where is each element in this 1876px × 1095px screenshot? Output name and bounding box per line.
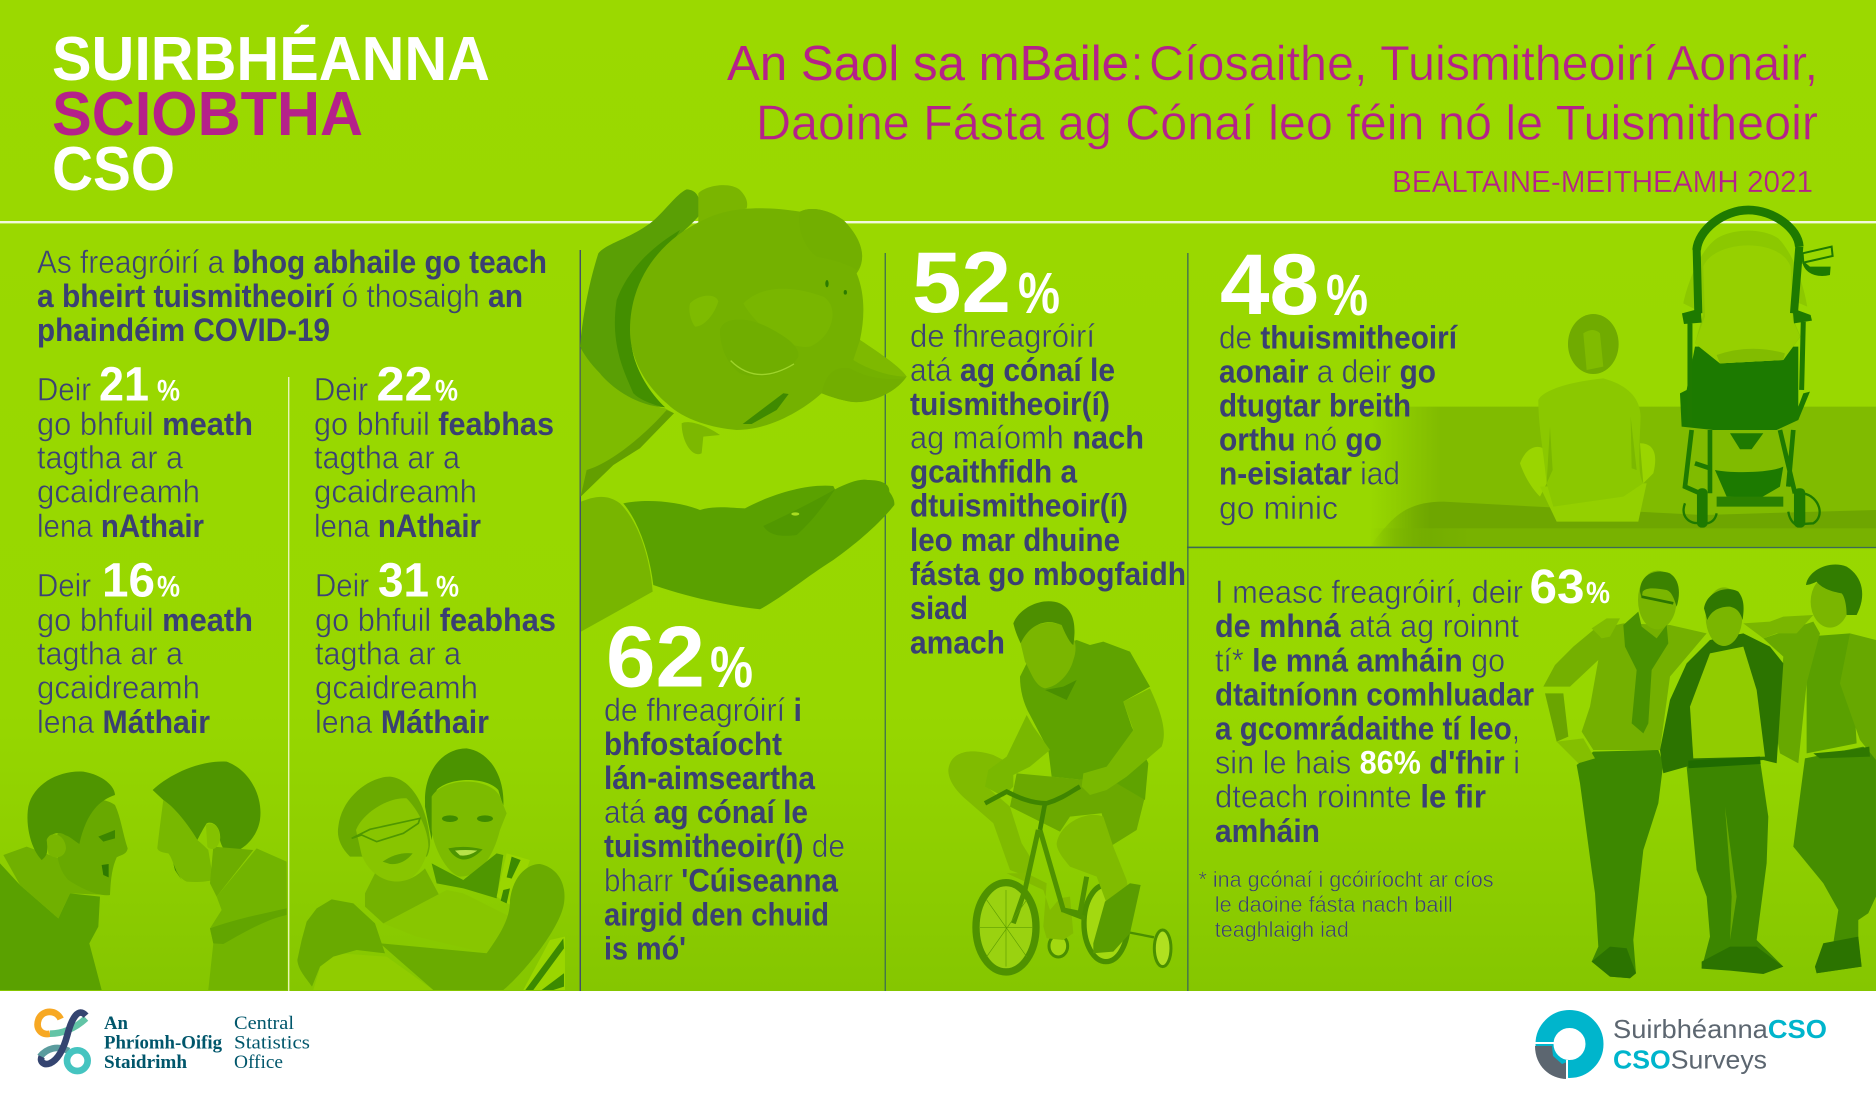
title: Suirbhéanna Sciobtha CSO: CSO [52,135,175,204]
stat: 52% living with parents: dtuismitheoir(í) [910,488,1128,524]
stat: 48% of lone parents: 48 [1220,237,1319,333]
stat: 62% full-time employed living with parents [604,610,845,966]
stat: 48% of lone parents: go minic [1219,490,1338,526]
stat: 21% worsened relationship with father: 21 [99,359,149,412]
stat: 52% living with parents: ag maíomh nach [910,420,1144,456]
stat: 52% living with parents: tuismitheoir(í) [910,386,1110,422]
stat: 22% improved relationship with father: go bhfuil feabhas [314,406,554,442]
stat: 21% worsened relationship with father [37,359,253,544]
icon: surveys ring [1535,1019,1594,1080]
logo: Central Statistics Office [38,1012,310,1073]
stat: 21% worsened relationship with father: Deir [37,372,91,408]
stat: 63% of women, 86% of men sharing: tí* le mná amháin go [1215,642,1505,678]
right man [1763,565,1876,973]
stat: 62% full-time employed living with parents: 62 [606,610,705,706]
logo: Central Statistics Office: Staidrimh [104,1052,187,1073]
text block: relationships intro: phaindéim COVID-19 [37,312,330,348]
stat: 63% of women, 86% of men sharing: I measc freagróirí, deir [1215,574,1523,610]
stat: 52% living with parents: % [1018,261,1060,326]
text block: relationships intro [37,244,547,348]
stat: 16% worsened relationship with mother: go bhfuil meath [37,602,253,638]
stat: 62% full-time employed living with parents: tuismitheoir(í) de [604,828,845,864]
footnote: * ina gcónaí i gcóiríocht ar cíos [1198,867,1494,892]
stat: 22% improved relationship with father: tagtha ar a [314,440,460,476]
stat: 31% improved relationship with mother: gcaidreamh [315,670,478,706]
stat: 63% of women, 86% of men sharing: amháin [1215,813,1320,849]
stat: 52% living with parents: de fhreagróirí [910,318,1095,354]
photo: three men arm in arm [1543,565,1876,978]
stat: 16% worsened relationship with mother: gcaidreamh [37,670,200,706]
open lower hand [581,480,894,632]
logo: Central Statistics Office: An [104,1013,128,1034]
stat: 52% living with parents: atá ag cónaí le [910,352,1115,388]
stat: 48% of lone parents: n-eisiatar iad [1219,456,1400,492]
logo: Central Statistics Office: Statistics [234,1032,310,1054]
title: Suirbhéanna Sciobtha CSO: SUIRBHÉANNA [52,25,490,94]
stroller [1680,210,1833,528]
stat: 48% of lone parents: % [1326,263,1368,328]
stat: 63% of women, 86% of men sharing [1215,561,1610,849]
stat: 22% improved relationship with father [314,359,554,544]
text block: relationships intro: a bheirt tuismitheoirí ó thosaigh an [37,278,523,314]
header rule [0,221,1876,223]
stat: 21% worsened relationship with father: tagtha ar a [37,440,183,476]
footer band [0,991,1876,1095]
stat: 63% of women, 86% of men sharing: a gcomrádaithe tí leo, [1215,710,1520,746]
stat: 62% full-time employed living with parents: lán-aimseartha [604,760,815,796]
stat: 31% improved relationship with mother: lena Máthair [315,704,489,740]
panel dividers [288,250,1876,991]
stat: 52% living with parents: 52 [912,235,1011,331]
photo: man on a child's bicycle [948,601,1171,972]
stat: 16% worsened relationship with mother: 16 [102,555,155,608]
stat: 31% improved relationship with mother: tagtha ar a [315,636,461,672]
stat: 22% improved relationship with father: 22 [376,359,432,412]
logo: CSO Surveys: CSOSurveys [1613,1044,1767,1074]
footnote: le daoine fásta nach baill [1215,892,1453,917]
stat: 22% improved relationship with father: % [435,375,458,408]
heading: survey topic: Daoine Fásta ag Cónaí leo féin nó le Tuismitheoir [756,96,1818,150]
stat: 52% living with parents [910,235,1186,660]
stat: 63% of women, 86% of men sharing: % [1586,575,1610,610]
heading: survey topic: Cíosaithe, Tuismitheoirí Aonair, [1149,37,1818,91]
photo: arguing father and son [0,762,287,990]
stat: 62% full-time employed living with parents: airgid den chuid [604,897,829,933]
stat: 16% worsened relationship with mother: tagtha ar a [37,636,183,672]
stat: 21% worsened relationship with father: gcaidreamh [37,474,200,510]
date: BEALTAINE-MEITHEAMH 2021 [1392,164,1813,199]
stat: 16% worsened relationship with mother: Deir [37,568,91,604]
stat: 52% living with parents: leo mar dhuine [910,522,1120,558]
stat: 63% of women, 86% of men sharing: dteach roinnte le fir [1215,778,1486,814]
stat: 63% of women, 86% of men sharing: de mhná atá ag roinnt [1215,608,1519,644]
stat: 62% full-time employed living with parents: bharr 'Cúiseanna [604,862,838,898]
seated woman [1520,314,1655,522]
heading: survey topic: An Saol sa mBaile [727,37,1129,91]
stat: 48% of lone parents: de thuismitheoirí [1219,319,1458,355]
stat: 22% improved relationship with father: Deir [314,372,368,408]
icon: CSO knot [38,1012,88,1071]
footnote: teaghlaigh iad [1215,917,1349,942]
stat: 21% worsened relationship with father: % [157,375,180,408]
stat: 62% full-time employed living with parents: atá ag cónaí le [604,794,808,830]
photo: woman and stroller on a beach [1370,210,1876,547]
logo: Central Statistics Office: Central [234,1013,294,1034]
title: Suirbhéanna Sciobtha CSO [52,25,490,204]
stat: 48% of lone parents [1219,237,1458,526]
stat: 52% living with parents: siad [910,590,968,626]
stat: 31% improved relationship with mother [315,555,556,740]
logo: Central Statistics Office: Office [234,1052,283,1073]
heading: survey topic: : [1131,37,1143,91]
stat: 16% worsened relationship with mother: % [157,571,180,604]
stat: 21% worsened relationship with father: go bhfuil meath [37,406,253,442]
left man [1543,571,1707,978]
stat: 62% full-time employed living with parents: is mó' [604,930,686,966]
logo: CSO Surveys: Suirbhéanna CSO [1613,1014,1827,1044]
title: Suirbhéanna Sciobtha CSO: SCIOBTHA [52,80,363,149]
stat: 31% improved relationship with mother: 31 [378,555,429,608]
photo: piggy bank held in hand [580,185,907,632]
stat: 62% full-time employed living with parents: % [710,635,753,700]
stat: 22% improved relationship with father: gcaidreamh [314,474,477,510]
footnote [1198,867,1494,942]
piggy bank [630,208,907,454]
stat: 48% of lone parents: dtugtar breith [1219,387,1411,423]
stat: 63% of women, 86% of men sharing: sin le hais 86% d'fhir i [1215,744,1520,780]
upper hand holding piggy bank [580,185,747,497]
heading: survey topic [727,37,1818,199]
stat: 16% worsened relationship with mother: lena Máthair [37,704,210,740]
stat: 63% of women, 86% of men sharing: 63 [1530,561,1584,614]
stat: 62% full-time employed living with parents: de fhreagróirí i [604,692,802,728]
middle man [1660,587,1813,974]
logo: CSO Surveys [1535,1014,1827,1080]
photo: mother and daughter [297,748,565,990]
stat: 21% worsened relationship with father: lena nAthair [37,508,204,544]
stat: 48% of lone parents: aonair a deir go [1219,353,1436,389]
stat: 48% of lone parents: orthu nó go [1219,422,1382,458]
stat: 52% living with parents: fásta go mbogfaidh [910,556,1186,592]
stat: 63% of women, 86% of men sharing: dtaitníonn comhluadar [1215,676,1534,712]
stat: 52% living with parents: gcaithfidh a [910,454,1077,490]
text block: relationships intro: As freagróirí a bhog abhaile go teach [37,244,547,280]
stat: 52% living with parents: amach [910,624,1005,660]
stat: 31% improved relationship with mother: Deir [315,568,369,604]
stat: 31% improved relationship with mother: go bhfuil feabhas [315,602,556,638]
logo: Central Statistics Office: Phríomh-Oifig [104,1032,222,1054]
stat: 31% improved relationship with mother: % [436,571,459,604]
stat: 16% worsened relationship with mother [37,555,253,740]
stat: 22% improved relationship with father: lena nAthair [314,508,481,544]
stat: 62% full-time employed living with parents: bhfostaíocht [604,726,782,762]
